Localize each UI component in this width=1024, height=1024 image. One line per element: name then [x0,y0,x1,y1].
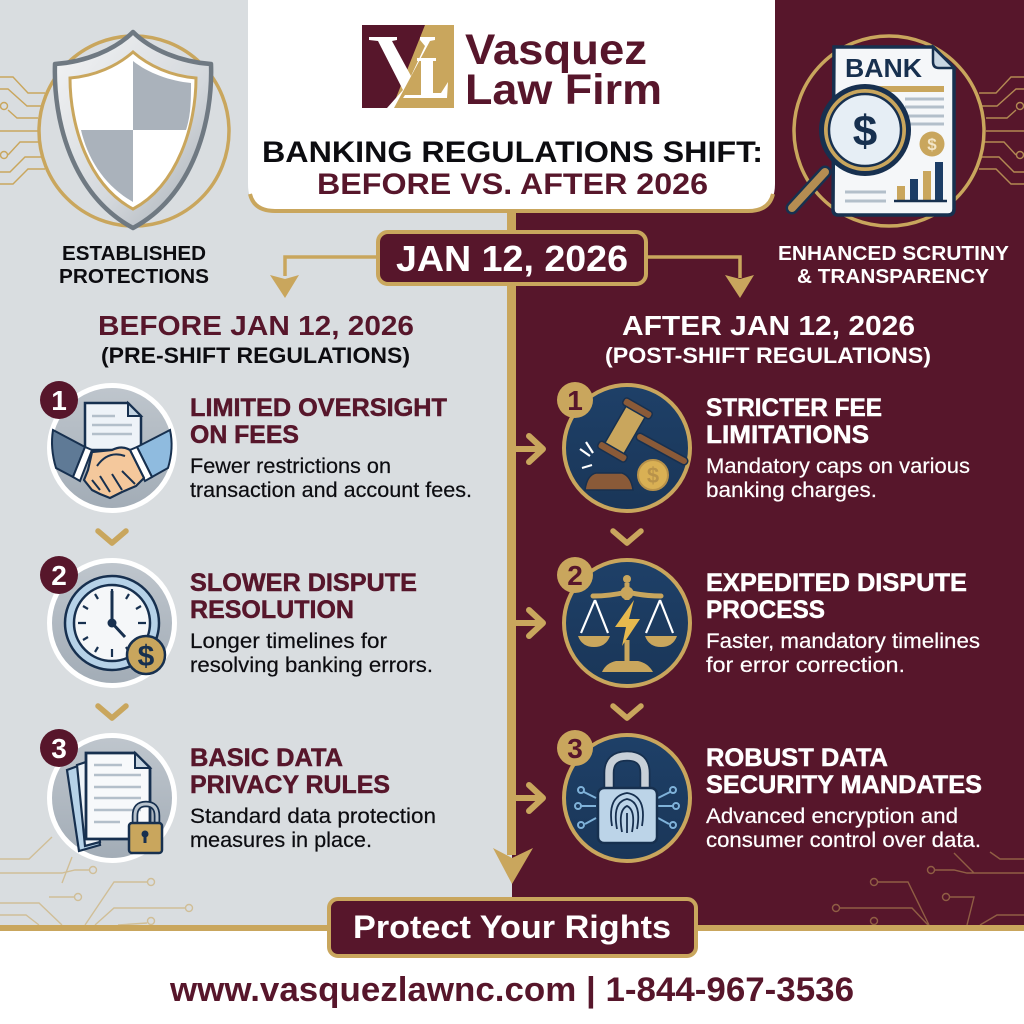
footer gold rule [0,925,1024,931]
chevron [613,706,641,718]
arrow: step 3 [516,785,543,811]
text: slower dispute: resolving banking errors. [190,654,433,677]
chevron [613,531,641,543]
circuit traces: top right [979,77,1024,184]
heading: before: (PRE-SHIFT REGULATIONS) [101,343,410,368]
label: established protections: ESTABLISHED [62,243,206,265]
icon: documents with padlock [50,736,174,860]
badge 3: 3 [567,733,583,764]
heading: before: BEFORE JAN 12, 2026 [98,310,414,341]
before step 3 [40,729,436,860]
icon: clock with coin: $ [138,640,155,673]
badge 1: 1 [567,385,583,416]
icon: shield [39,32,229,228]
heading: after [605,310,931,368]
arrow: date to after [646,257,754,298]
text: stricter fee: LIMITATIONS [706,421,869,449]
badge 1 [40,381,78,419]
text: stricter fee [706,394,970,502]
header panel [248,0,775,211]
logo mark [362,25,454,108]
text: robust data: SECURITY MANDATES [706,771,982,799]
text: limited oversight: Fewer restrictions on [190,455,391,478]
firm name: Law Firm [465,66,662,114]
date badge [378,232,646,284]
text: basic data: measures in place. [190,829,372,852]
text: basic data [190,744,436,852]
contact line: www.vasquezlawnc.com | 1-844-967-3536 [169,971,854,1009]
text: expedited dispute: Faster, mandatory timelines [706,630,980,653]
icon: bank document with magnifier: $ [853,107,877,156]
label: established protections: PROTECTIONS [59,266,209,288]
after step 1 [557,382,970,511]
text: robust data [706,744,982,852]
text: stricter fee: Mandatory caps on various [706,455,970,478]
center timeline with arrowhead [493,205,533,884]
text: robust data: consumer control over data. [706,829,981,852]
call to action button: Protect Your Rights [353,909,671,945]
badge 3: 3 [51,733,67,764]
after step 2 [557,557,980,686]
label: enhanced scrutiny: & TRANSPARENCY [797,266,990,288]
date badge: JAN 12, 2026 [396,238,628,279]
footer background [0,928,1024,1024]
icon: balance scales with bolt [564,560,690,686]
badge 2: 2 [51,560,67,591]
text: slower dispute: RESOLUTION [190,596,354,624]
badge 2 [557,557,593,593]
before step 1 [40,381,472,510]
text: slower dispute: SLOWER DISPUTE [190,569,417,597]
title: BANKING REGULATIONS SHIFT: [262,136,763,169]
circuit traces: bottom right [832,852,1024,925]
text: limited oversight: transaction and account fees. [190,479,472,502]
text: slower dispute: Longer timelines for [190,630,387,653]
circuit traces: bottom left [0,837,192,925]
text: slower dispute [190,569,433,677]
icon: bank document with magnifier: BANK [845,53,922,83]
heading: after: (POST-SHIFT REGULATIONS) [605,343,931,368]
text: stricter fee: STRICTER FEE [706,394,882,422]
firm name: Vasquez [465,26,647,74]
heading: before [98,310,414,368]
after step 3 [557,730,982,861]
chevron [98,531,126,543]
icon: bank document with magnifier [792,36,984,226]
label: established protections [59,243,209,288]
panel: after background [512,0,1024,928]
text: limited oversight [190,394,472,502]
text: limited oversight: ON FEES [190,421,299,449]
text: expedited dispute: for error correction. [706,654,905,677]
icon: gavel and coin [564,385,690,511]
icon: gavel and coin: $ [647,463,659,488]
badge 1 [557,382,593,418]
badge 2 [40,556,78,594]
text: basic data: Standard data protection [190,805,436,828]
call to action button [329,899,696,956]
heading: after: AFTER JAN 12, 2026 [622,310,915,341]
title [262,136,763,201]
badge 3 [40,729,78,767]
arrow: date to before [270,257,378,298]
label: enhanced scrutiny [778,243,1010,288]
title: BEFORE VS. AFTER 2026 [317,168,708,201]
text: expedited dispute: EXPEDITED DISPUTE [706,569,967,597]
text: expedited dispute [706,569,980,677]
text: limited oversight: LIMITED OVERSIGHT [190,394,447,422]
before step 2 [40,556,433,686]
text: robust data: ROBUST DATA [706,744,888,772]
icon: bank document with magnifier: $ [927,135,937,154]
text: stricter fee: banking charges. [706,479,877,502]
icon: padlock with fingerprint [564,735,690,861]
text: basic data: PRIVACY RULES [190,771,390,799]
text: basic data: BASIC DATA [190,744,343,772]
label: enhanced scrutiny: ENHANCED SCRUTINY [778,243,1010,265]
arrow: step 1 [516,436,543,462]
text: robust data: Advanced encryption and [706,805,958,828]
icon: clock with coin [50,560,174,686]
badge 1: 1 [51,385,67,416]
circuit traces: top left [0,77,45,184]
text: expedited dispute: PROCESS [706,596,825,624]
badge 3 [557,730,593,766]
firm name [465,26,662,114]
badge 2: 2 [567,560,583,591]
icon: handshake [50,386,174,510]
panel: before background [0,0,512,928]
chevron [98,706,126,718]
arrow: step 2 [516,610,543,636]
